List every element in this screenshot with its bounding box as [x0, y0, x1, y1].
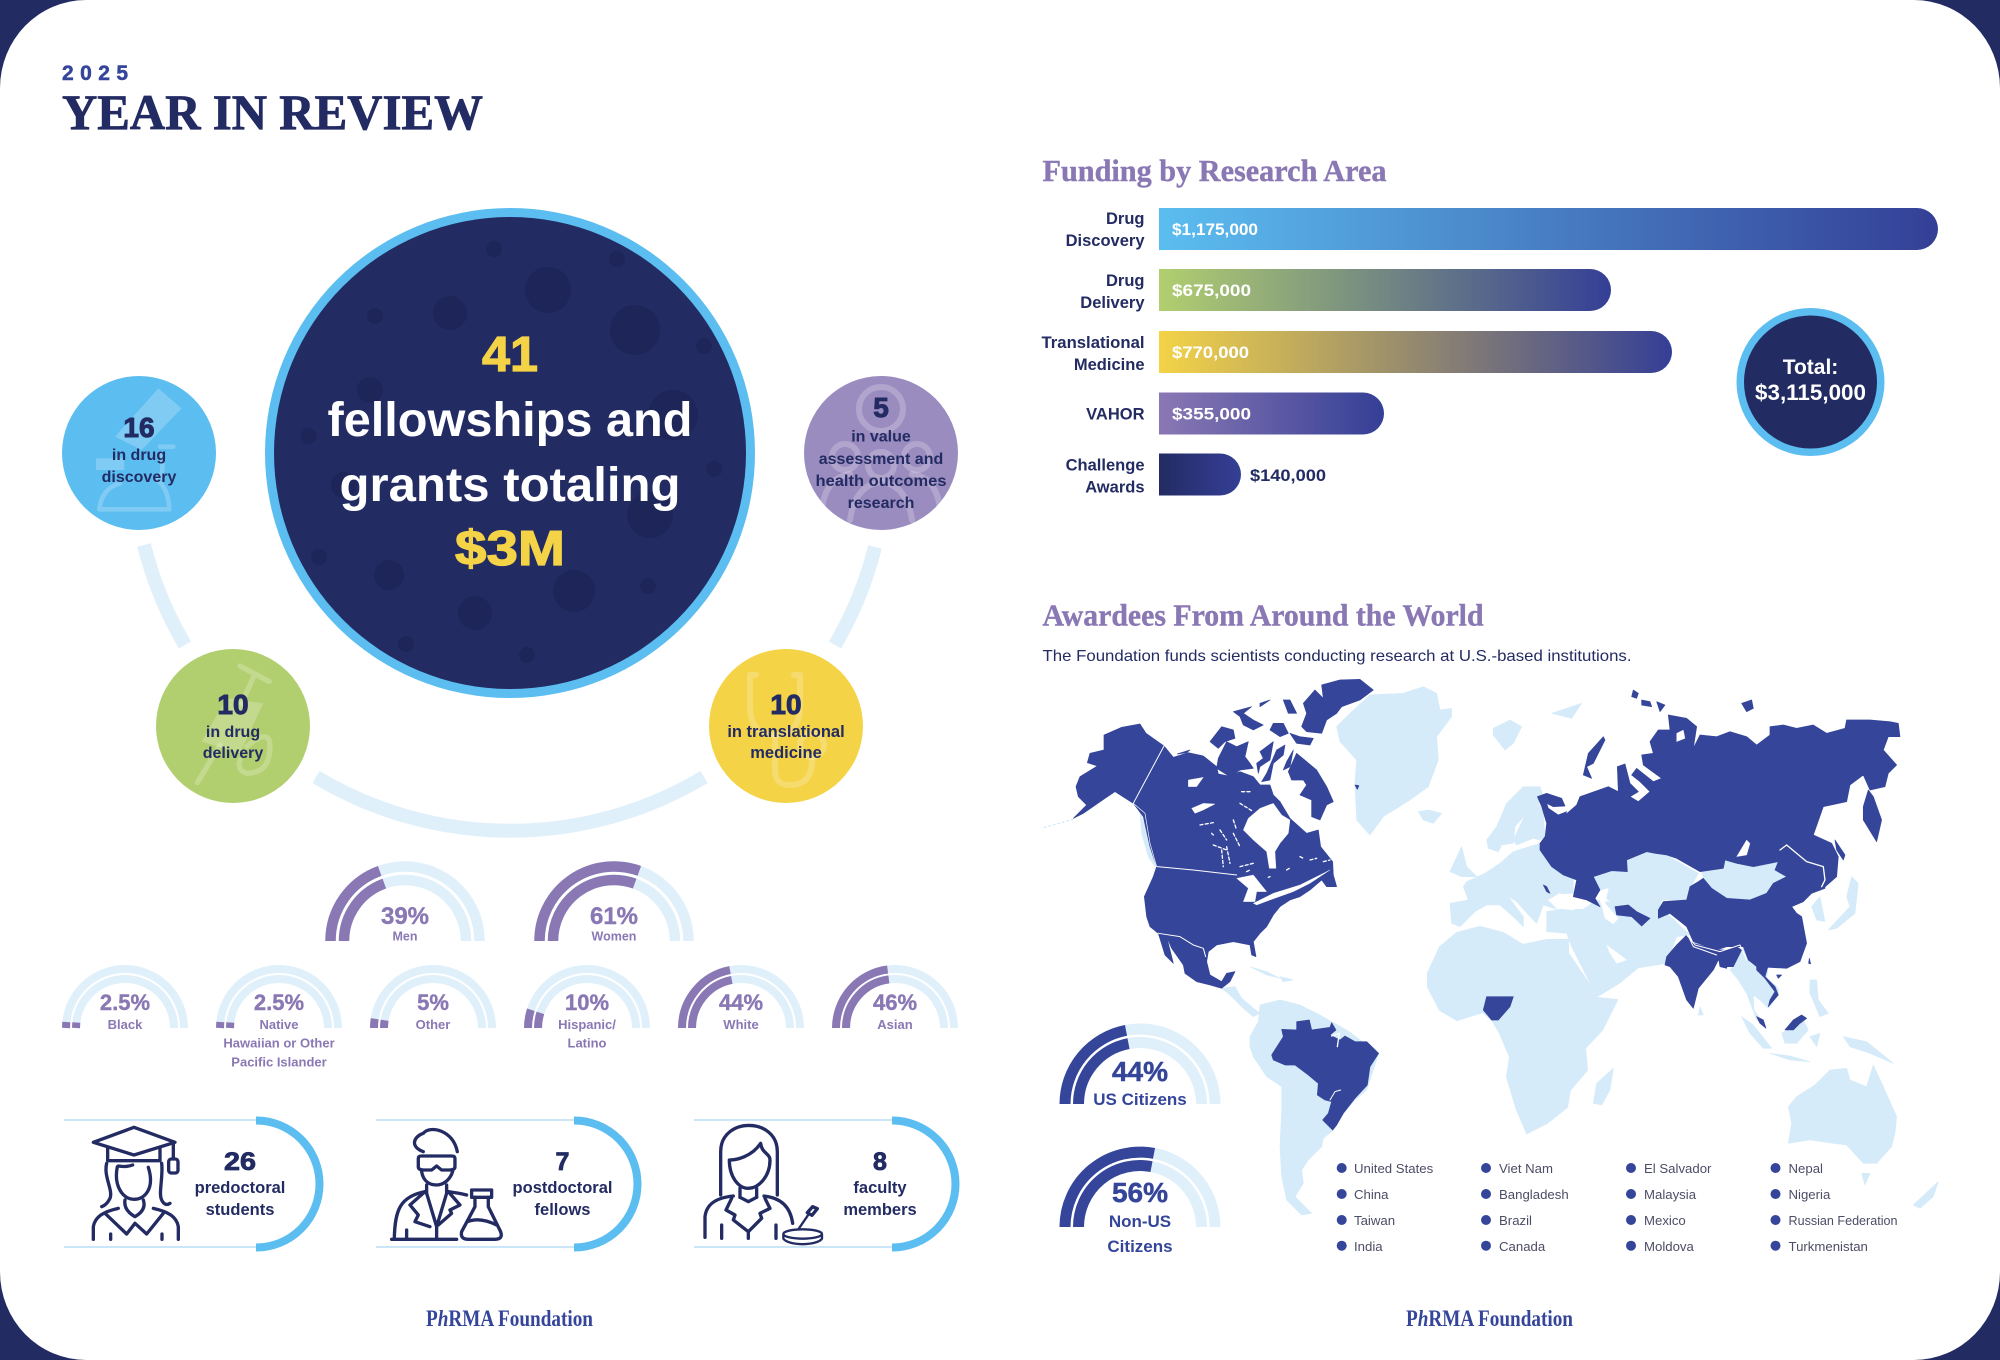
circle: 5 in value assessment: 5: [873, 392, 889, 423]
heading: 2025 year in review: 2025: [62, 62, 128, 85]
map legend: countries: Moldova: [1644, 1239, 1695, 1254]
map intro text: The Foundation funds scientists conducting research at U.S.-based institutions.: [1042, 648, 1632, 665]
card: 7 postdoctoral fellows: [376, 1120, 637, 1248]
bar: vahor: VAHOR: [1086, 406, 1145, 424]
circle: 10 in drug delivery: [156, 649, 310, 803]
icon: microscope: [96, 388, 182, 509]
gauge: 56% non-us citizens: [1065, 1152, 1215, 1256]
gauge: 5% other: Other: [416, 1017, 450, 1032]
map legend: countries: Bangladesh: [1499, 1187, 1569, 1202]
circle: 10 in translational medicine: 10: [770, 689, 802, 720]
icon: stethoscope: [750, 675, 824, 785]
icon: syringe: [197, 666, 270, 783]
main circle text: [328, 328, 692, 576]
footer logo left: PhRMA Foundation: [426, 1306, 593, 1331]
world map: [1042, 679, 1938, 1215]
gauge: 5% other: 5%: [417, 990, 449, 1015]
bar: vahor: $355,000: [1172, 404, 1251, 424]
gauge: 44% us citizens: [1065, 1029, 1215, 1109]
map legend: countries: Nepal: [1788, 1161, 1823, 1176]
gauge: 10% hispanic latino: Latino: [568, 1036, 607, 1050]
craters texture: [301, 241, 722, 663]
bar: drug discovery: Drug: [1106, 210, 1144, 228]
map legend: countries: Russian Federation: [1788, 1213, 1898, 1228]
card text: predoctoral: [195, 1179, 285, 1197]
circle: 16 in drug discovery: in drug: [112, 447, 166, 464]
main circle text: grants totaling: [340, 459, 680, 512]
connecting ring arcs: [144, 545, 875, 831]
bar: translational medicine: [1042, 331, 1672, 374]
gauge: 44% white: [682, 969, 800, 1032]
circle: 10 in translational medicine: [709, 649, 863, 803]
card text: [195, 1148, 285, 1219]
map legend: countries: Viet Nam: [1499, 1161, 1553, 1176]
circle: 16 in drug discovery: discovery: [102, 469, 176, 486]
heading: funding by research area: Funding by Research Area: [1042, 153, 1387, 188]
map legend: countries: El Salvador: [1644, 1161, 1712, 1176]
total callout circle: Total:: [1783, 356, 1838, 379]
gauge: 39% men: 39%: [381, 903, 429, 930]
map legend: countries: Nigeria: [1788, 1187, 1831, 1202]
highlighted: brazil and nigeria: [1272, 997, 1513, 1130]
bar: drug delivery: $675,000: [1172, 281, 1251, 300]
bar: translational medicine: Medicine: [1074, 356, 1144, 374]
gauge: 2.5% black: [66, 969, 184, 1032]
highlighted: india: [1665, 935, 1742, 1008]
gauge: 2.5% black: 2.5%: [100, 990, 150, 1015]
map legend: countries: China: [1354, 1187, 1389, 1202]
bar: challenge awards: Awards: [1085, 478, 1144, 496]
gauge: 39% men: Men: [392, 930, 418, 944]
gauge: 2.5% native hawaiian: 2.5%: [254, 990, 304, 1015]
bar: drug delivery: Drug: [1106, 272, 1144, 290]
circle: 16 in drug discovery: [62, 376, 216, 530]
circle: 5 in value assessment: in value: [851, 428, 911, 446]
gauge: 10% hispanic latino: 10%: [565, 990, 609, 1015]
icon: scientist with flask: [392, 1130, 501, 1239]
main circle text: fellowships and: [328, 394, 692, 447]
gauge: 61% women: Women: [592, 930, 636, 944]
card text: fellows: [535, 1201, 590, 1219]
highlighted: china: [1658, 845, 1825, 968]
gauge: 56% non-us citizens: 56%: [1112, 1177, 1168, 1208]
map legend: countries: Malaysia: [1644, 1187, 1697, 1202]
gauge: 61% women: [540, 866, 688, 944]
card text: 7: [556, 1148, 569, 1176]
bar: translational medicine: Translational: [1042, 334, 1144, 352]
bar: challenge awards: [1066, 454, 1326, 496]
map legend: countries: Taiwan: [1354, 1213, 1395, 1228]
map legend: countries: Brazil: [1499, 1213, 1532, 1228]
card: 26 predoctoral students: [64, 1120, 320, 1248]
circle: 5 in value assessment: health outcomes: [816, 473, 947, 490]
gauge: 39% men: [330, 866, 480, 944]
gauge: 46% asian: [836, 969, 954, 1032]
circle: 10 in drug delivery: delivery: [203, 745, 263, 762]
card text: postdoctoral: [513, 1179, 612, 1197]
footer logo right: PhRMA Foundation: [1406, 1306, 1573, 1331]
map legend: countries: United States: [1354, 1161, 1434, 1176]
map legend: countries: [1337, 1161, 1898, 1254]
bar chart: funding: [1042, 208, 1938, 496]
card text: [843, 1148, 917, 1219]
gauge: 2.5% native hawaiian: Native: [259, 1017, 299, 1032]
heading: 2025 year in review: YEAR IN REVIEW: [62, 84, 483, 140]
bar: drug discovery: Discovery: [1066, 232, 1145, 250]
circle: 5 in value assessment: research: [848, 495, 914, 512]
main circle: 41 fellowships and grants: [265, 208, 755, 698]
card text: students: [206, 1201, 274, 1219]
gauge: 2.5% native hawaiian: Pacific Islander: [231, 1054, 327, 1070]
circle: 16 in drug discovery: 16: [123, 412, 155, 443]
circle: 10 in drug delivery: 10: [217, 689, 249, 720]
gauge: 56% non-us citizens: Citizens: [1107, 1237, 1173, 1256]
highlighted: russia moldova turkmenistan: [1537, 690, 1900, 1030]
main circle text: $3M: [455, 522, 565, 576]
heading: awardees from around the world: Awardees From Around the World: [1042, 598, 1484, 632]
map legend: countries: India: [1354, 1239, 1383, 1254]
circle: 5 in value assessment: [804, 376, 958, 530]
gauge: 44% white: 44%: [719, 990, 763, 1015]
circle: 10 in drug delivery: in drug: [206, 724, 260, 741]
icon: graduate: [93, 1127, 178, 1239]
card text: 26: [224, 1148, 256, 1176]
gauge: 44% us citizens: 44%: [1112, 1056, 1168, 1087]
bar: challenge awards: Challenge: [1066, 456, 1144, 474]
gauge: 46% asian: Asian: [877, 1017, 913, 1032]
main circle text: 41: [482, 328, 538, 382]
total callout circle: [1736, 308, 1884, 456]
bar: vahor: [1086, 392, 1384, 434]
highlighted: north america: [1073, 679, 1373, 988]
card text: [513, 1148, 612, 1219]
light landmasses: [1042, 687, 1938, 1215]
gauge: 46% asian: 46%: [873, 990, 917, 1015]
circle: 10 in translational medicine: medicine: [750, 744, 822, 762]
map legend: countries: Mexico: [1644, 1213, 1686, 1228]
gauge: 44% white: White: [723, 1017, 759, 1032]
gauge: 2.5% native hawaiian: [220, 969, 338, 1070]
gauge: 61% women: 61%: [590, 903, 638, 930]
gauge: 2.5% native hawaiian: Hawaiian or Other: [223, 1036, 335, 1050]
icon: people and magnifier: [822, 387, 940, 520]
gauge: 5% other: [374, 969, 492, 1032]
total callout circle: $3,115,000: [1755, 380, 1866, 405]
gauge: 10% hispanic latino: Hispanic/: [558, 1017, 616, 1032]
bar: translational medicine: $770,000: [1172, 343, 1249, 362]
map legend: countries: Canada: [1499, 1239, 1546, 1254]
gauge: 56% non-us citizens: Non-US: [1109, 1212, 1171, 1231]
gauge: 2.5% black: Black: [108, 1017, 143, 1032]
icon: faculty with petri dish: [705, 1125, 822, 1244]
card text: 8: [873, 1148, 887, 1176]
bar: challenge awards: $140,000: [1250, 466, 1326, 485]
bar: drug delivery: Delivery: [1080, 294, 1145, 312]
map legend: countries: Turkmenistan: [1788, 1239, 1868, 1254]
card text: members: [843, 1201, 917, 1219]
card text: faculty: [853, 1179, 907, 1197]
bar: drug discovery: [1066, 208, 1938, 250]
bar: drug delivery: [1080, 269, 1611, 312]
card: 8 faculty members: [694, 1120, 956, 1248]
gauge: 44% us citizens: US Citizens: [1093, 1090, 1187, 1109]
bar: drug discovery: $1,175,000: [1172, 220, 1258, 239]
circle: 5 in value assessment: assessment and: [819, 451, 943, 468]
circle: 10 in translational medicine: in translational: [727, 723, 845, 741]
gauge: 10% hispanic latino: [528, 969, 646, 1050]
